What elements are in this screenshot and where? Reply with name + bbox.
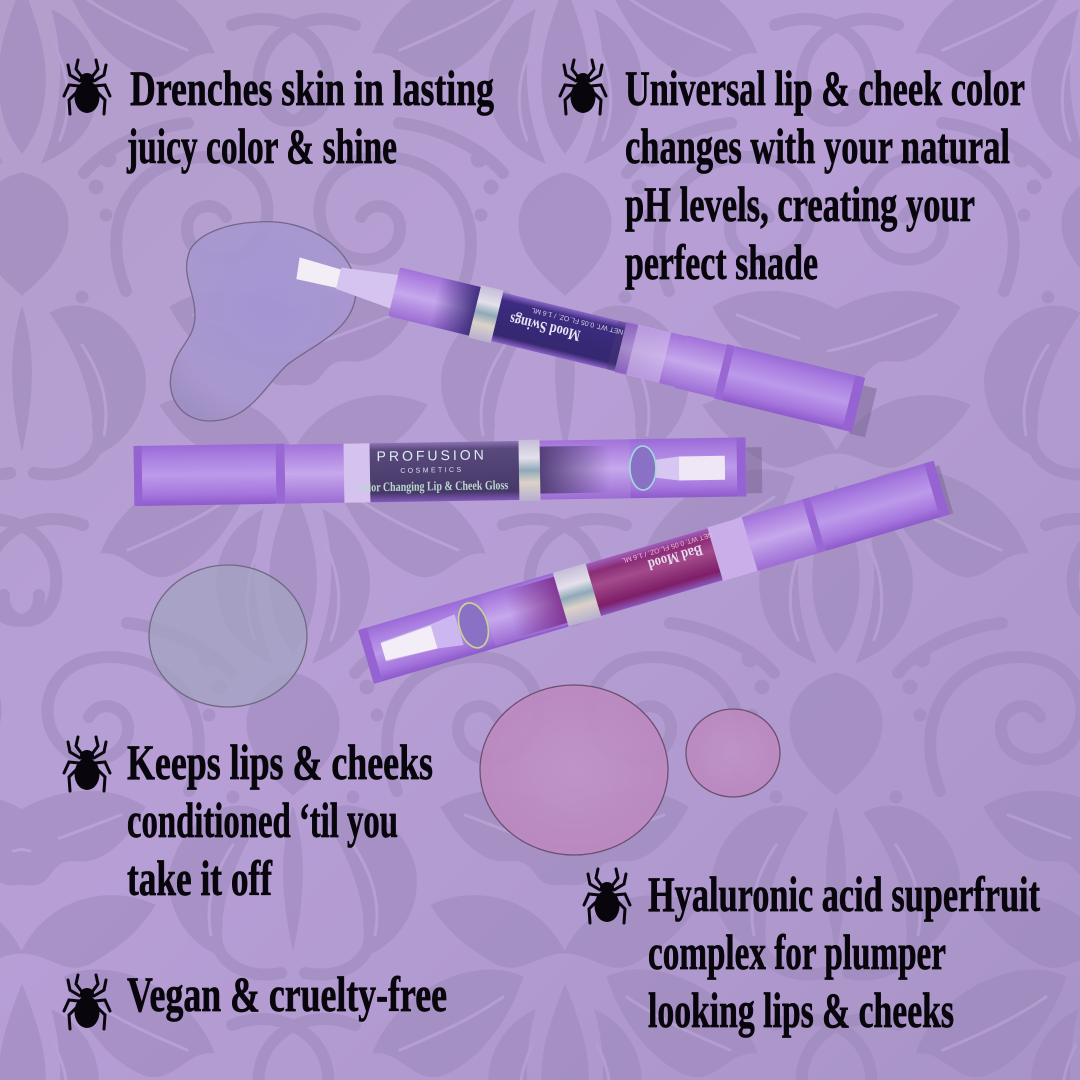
holographic band bbox=[518, 440, 540, 501]
pen: Mood Swings (navy) bbox=[290, 241, 879, 437]
holographic band bbox=[553, 563, 601, 627]
swatch: small pink gloss blob bbox=[686, 709, 780, 797]
swatch: large pink gloss blob bbox=[480, 685, 668, 855]
benefit: hyaluronic acid bbox=[648, 866, 1040, 1038]
benefit: conditioning: Keeps lips & cheeks bbox=[127, 734, 433, 790]
net weight: NET WT. 0.05 FL.OZ. / 1.6 ML bbox=[531, 306, 624, 335]
icon: spider bbox=[584, 869, 630, 923]
benefit: lasting colour bbox=[126, 60, 494, 174]
benefit: universal shade: perfect shade bbox=[625, 234, 818, 290]
pen: Bad Mood (berry) bbox=[358, 460, 953, 684]
pen: Profusion (dark) bbox=[134, 436, 762, 507]
benefit: vegan: Vegan & cruelty-free bbox=[127, 966, 447, 1022]
hologram seal bbox=[630, 446, 656, 490]
product name: Mood Swings bbox=[508, 310, 582, 344]
benefit: conditioning: take it off bbox=[127, 850, 273, 906]
icon: spider bbox=[64, 737, 110, 791]
benefit: lasting colour: juicy color & shine bbox=[126, 118, 397, 174]
icon: spider bbox=[64, 60, 110, 114]
hologram seal bbox=[454, 599, 493, 651]
benefit: lasting colour: Drenches skin in lasting bbox=[130, 60, 494, 116]
product name: Bad Mood bbox=[646, 541, 704, 572]
swatch: lavender gloss blob bbox=[170, 222, 356, 421]
benefit: conditioning bbox=[127, 734, 433, 906]
swatch: clear blue-grey gloss blob bbox=[149, 565, 307, 707]
holographic band bbox=[468, 285, 504, 343]
brand name: PROFUSION bbox=[376, 446, 487, 464]
net weight: NET WT. 0.05 FL.OZ. / 1.6 ML bbox=[621, 530, 713, 564]
product description: Color Changing Lip & Cheek Gloss bbox=[356, 477, 508, 495]
benefit: conditioning: conditioned ‘til you bbox=[127, 792, 398, 848]
brand subtitle: COSMETICS bbox=[400, 467, 464, 475]
benefit: universal shade bbox=[625, 60, 1025, 290]
icon: spider bbox=[64, 975, 110, 1029]
icon: spider bbox=[560, 60, 606, 114]
